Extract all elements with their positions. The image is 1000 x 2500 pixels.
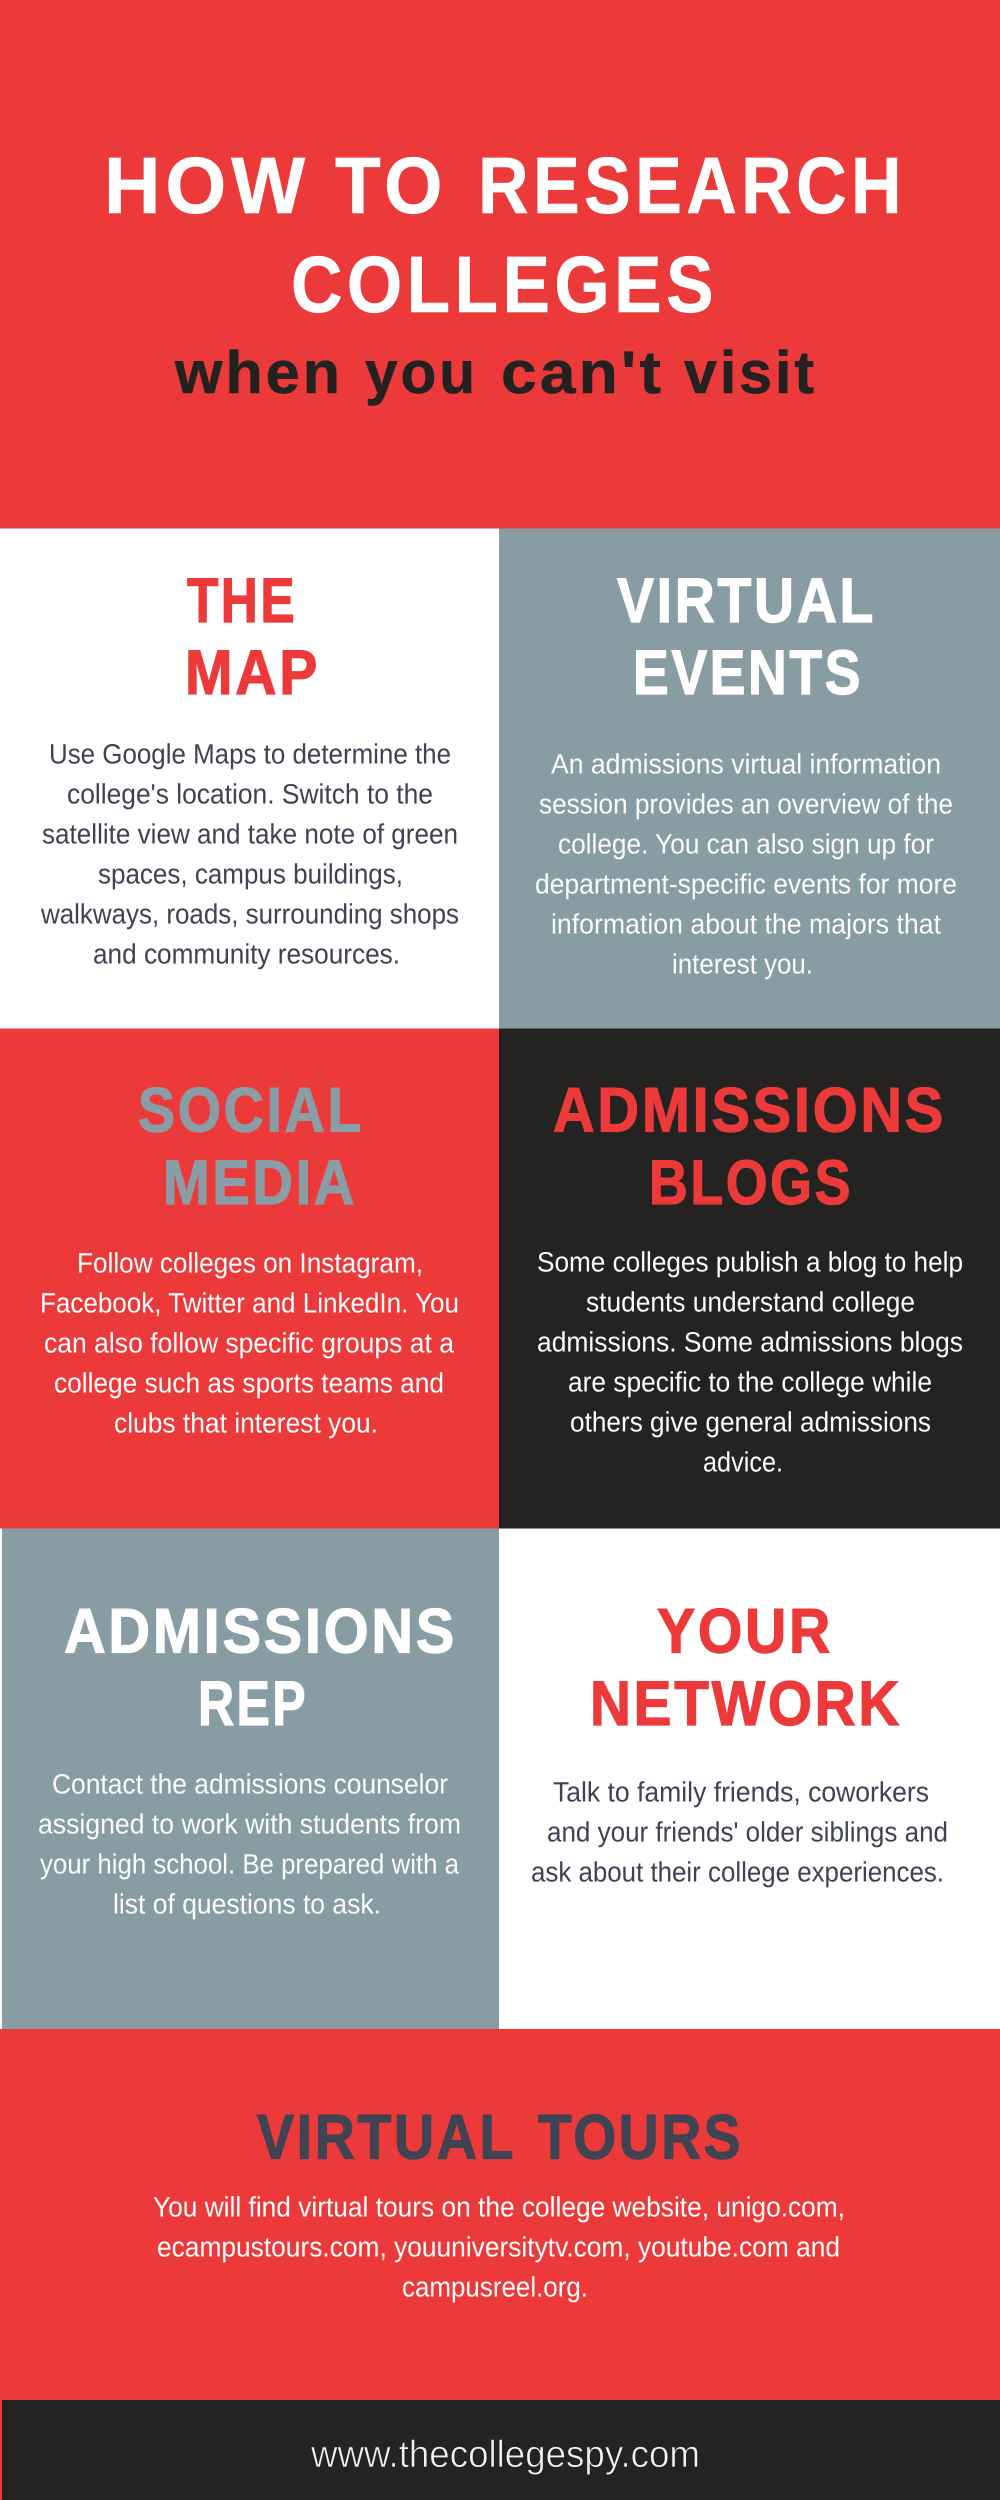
heading: admissions blogs: ADMISSIONS — [553, 1076, 946, 1146]
body text: virtual events: college. You can also sign up for — [558, 828, 934, 859]
panel: footer — [0, 2400, 1000, 2500]
heading: social media — [138, 1076, 364, 1218]
subtitle — [174, 339, 817, 406]
panel: social media — [0, 1028, 499, 1528]
body text: virtual tours: ecampustours.com, youuniversitytv.com, youtube.com and — [157, 2232, 840, 2263]
body text: the map: walkways, roads, surrounding shops — [40, 898, 459, 929]
heading: social media: SOCIAL — [138, 1076, 364, 1146]
panel: admissions blogs — [499, 1028, 1000, 1528]
body text: virtual tours: campusreel.org. — [402, 2272, 588, 2303]
heading: the map — [185, 566, 320, 708]
body text: the map: college's location. Switch to the — [67, 778, 433, 809]
body text: virtual tours — [153, 2192, 845, 2303]
body text: your network: and your friends' older siblings and — [547, 1817, 948, 1848]
subtitle: when — [174, 339, 343, 406]
heading: admissions blogs — [553, 1076, 946, 1218]
heading: the map: MAP — [185, 638, 320, 708]
body text: admissions rep: assigned to work with students from — [38, 1808, 461, 1839]
body text: the map: Use Google Maps to determine the — [49, 738, 451, 769]
heading: admissions rep: ADMISSIONS — [64, 1596, 457, 1666]
body text: admissions blogs: are specific to the college while — [568, 1367, 932, 1398]
panel: virtual events — [499, 528, 1000, 1028]
body text: virtual events: information about the majors that — [551, 908, 941, 939]
body text: admissions rep — [38, 1768, 461, 1919]
heading: virtual events — [617, 566, 876, 708]
heading: the map: THE — [187, 566, 297, 636]
heading: virtual events: VIRTUAL — [617, 566, 876, 636]
title: RESEARCH — [478, 141, 906, 230]
body text: social media: Follow colleges on Instagram, — [77, 1248, 423, 1279]
body text: virtual events — [535, 748, 957, 979]
heading: admissions rep — [64, 1596, 457, 1739]
body text: admissions blogs: students understand college — [586, 1287, 915, 1318]
body text: admissions blogs: advice. — [703, 1447, 783, 1478]
body text: social media: clubs that interest you. — [114, 1408, 378, 1439]
body text: social media: Facebook, Twitter and LinkedIn. You — [40, 1288, 459, 1319]
body text: social media: college such as sports teams and — [54, 1368, 444, 1399]
body text: admissions blogs: others give general admissions — [570, 1407, 931, 1438]
panel: title banner — [0, 0, 1000, 528]
title — [104, 141, 906, 329]
title: TO — [335, 141, 447, 230]
heading: social media: MEDIA — [163, 1148, 357, 1218]
body text: the map — [40, 738, 459, 969]
body text: your network — [531, 1777, 948, 1888]
body text: virtual events: department-specific events for more — [535, 868, 957, 899]
subtitle: you — [365, 339, 478, 406]
subtitle: can't — [501, 339, 664, 406]
heading: your network: NETWORK — [590, 1669, 902, 1739]
panel: your network — [499, 1528, 1000, 2029]
panel: the map — [0, 528, 499, 1028]
body text: the map: spaces, campus buildings, — [98, 858, 403, 889]
website address: www.thecollegespy.com — [310, 2434, 700, 2476]
heading: your network — [590, 1596, 902, 1739]
body text: virtual tours: You will find virtual tours on the college website, unigo.com, — [153, 2192, 845, 2223]
body text: virtual events: interest you. — [672, 948, 813, 979]
title: COLLEGES — [291, 240, 718, 329]
heading: virtual tours — [257, 2102, 743, 2172]
body text: admissions blogs: admissions. Some admissions blogs — [537, 1327, 963, 1358]
heading: your network: YOUR — [657, 1596, 833, 1666]
body text: admissions rep: your high school. Be prepared with a — [40, 1848, 459, 1879]
body text: your network: ask about their college experiences. — [531, 1857, 944, 1888]
subtitle: visit — [684, 339, 817, 406]
title: HOW — [104, 141, 310, 230]
body text: the map: satellite view and take note of green — [42, 818, 458, 849]
body text: virtual events: session provides an overview of the — [539, 788, 953, 819]
body text: social media — [40, 1248, 459, 1439]
body text: social media: can also follow specific groups at a — [44, 1328, 454, 1359]
body text: admissions blogs — [537, 1247, 963, 1478]
body text: admissions rep: list of questions to ask. — [113, 1888, 381, 1919]
panel: virtual tours — [0, 2029, 1000, 2400]
heading: virtual tours: VIRTUAL — [257, 2102, 516, 2172]
body text: virtual events: An admissions virtual information — [551, 748, 941, 779]
heading: admissions blogs: BLOGS — [649, 1148, 853, 1218]
body text: the map: and community resources. — [93, 938, 400, 969]
heading: virtual events: EVENTS — [633, 638, 863, 708]
body text: admissions rep: Contact the admissions counselor — [52, 1768, 448, 1799]
body text: admissions blogs: Some colleges publish a blog to help — [537, 1247, 963, 1278]
panel: admissions rep — [0, 1528, 499, 2029]
heading: admissions rep: REP — [198, 1669, 308, 1739]
heading: virtual tours: TOURS — [538, 2102, 743, 2172]
body text: your network: Talk to family friends, coworkers — [553, 1777, 929, 1808]
